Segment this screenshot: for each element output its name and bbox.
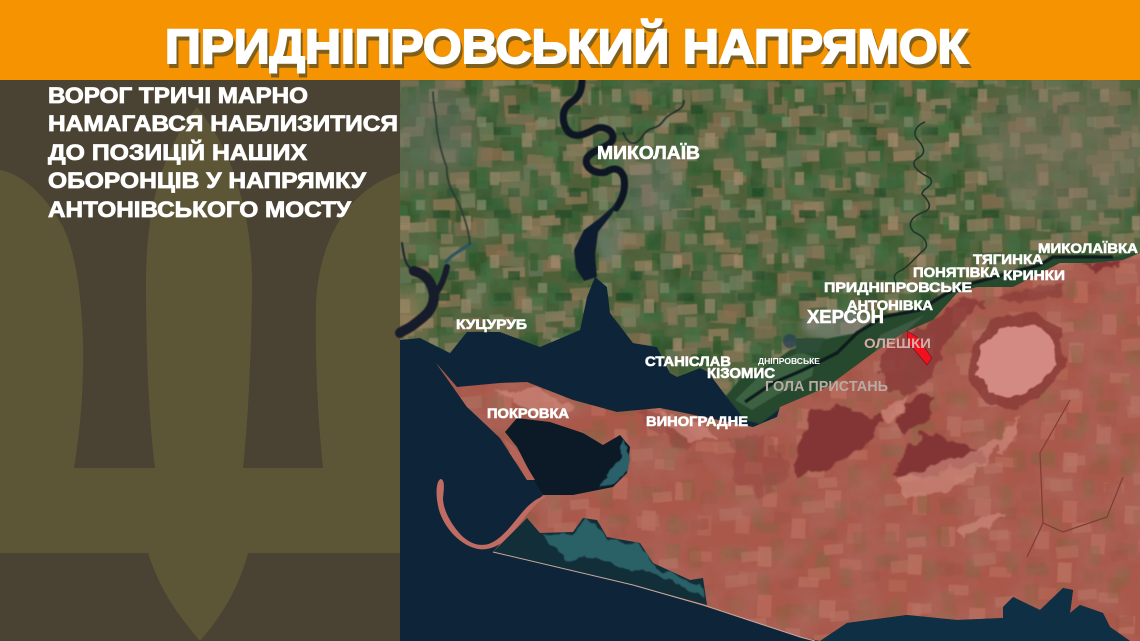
river: Tylihul estuary: [400, 92, 470, 333]
title shadow: ПРИДНІПРОВСЬКИЙ НАПРЯМОК: [167, 23, 971, 78]
panel: left olive background: [0, 0, 400, 641]
label: Херсон: ХЕРСОН: [807, 307, 884, 327]
text block: description: НАМАГАВСЯ НАБЛИЗИТИСЯ: [48, 111, 398, 136]
label: Станіслав: СТАНІСЛАВ: [645, 353, 731, 369]
spit line: [493, 552, 815, 641]
label: Кринки: КРИНКИ: [1003, 267, 1065, 283]
label: Дніпровське: ДНІПРОВСЬКЕ: [758, 357, 821, 366]
road lines: [1027, 400, 1123, 557]
sand massif: [976, 324, 1056, 398]
title: ПРИДНІПРОВСЬКИЙ НАПРЯМОК: [165, 19, 969, 74]
label: Миколаївка: МИКОЛАЇВКА: [1038, 240, 1138, 256]
label: Куцуруб: КУЦУРУБ: [456, 317, 527, 332]
Tendra spit: [437, 479, 545, 549]
title bar: [0, 0, 1140, 80]
label: Антонівка: АНТОНІВКА: [847, 297, 933, 313]
panel: satellite map: [384, 80, 1140, 641]
label: Придніпровське: ПРИДНІПРОВСЬКЕ: [824, 279, 972, 295]
label: Виноградне: ВИНОГРАДНЕ: [646, 413, 748, 429]
text block: description: ДО ПОЗИЦІЙ НАШИХ: [48, 140, 307, 165]
label: Миколаїв: МИКОЛАЇВ: [597, 143, 700, 163]
text block: description: [48, 83, 398, 222]
Dzharylhach bay: [503, 418, 630, 495]
arrow: red strike direction: [907, 331, 932, 365]
label: Покровка: ПОКРОВКА: [487, 405, 569, 421]
label: Гола Пристань: ГОЛА ПРИСТАНЬ: [765, 379, 888, 395]
text block: description: ВОРОГ ТРИЧІ МАРНО: [48, 83, 308, 108]
northern land with fields: [384, 80, 1140, 410]
occupied territory (red overlay): [430, 250, 1140, 641]
label: Тягинка: ТЯГИНКА: [973, 251, 1043, 267]
text block: description: ОБОРОНЦІВ У НАПРЯМКУ: [48, 168, 366, 193]
sand massif ring: [968, 312, 1066, 410]
map labels: [456, 143, 1138, 429]
lagoon: [493, 518, 707, 605]
label: Кізомис: КІЗОМИС: [707, 365, 775, 382]
river: Inhulets meander: [894, 122, 931, 286]
river: Southern Buh: [563, 80, 684, 281]
Dnipro delta: [726, 252, 1140, 424]
label: Олешки: ОЛЕШКИ: [864, 335, 931, 351]
text block: description: АНТОНІВСЬКОГО МОСТУ: [48, 197, 351, 222]
southern bay: [820, 588, 1130, 641]
dark forest patches: [640, 260, 1123, 500]
sea: [400, 80, 1140, 641]
label: Понятівка: ПОНЯТІВКА: [913, 264, 1000, 280]
pale sand strips: [495, 390, 1018, 538]
icon: trident watermark: [0, 107, 400, 641]
